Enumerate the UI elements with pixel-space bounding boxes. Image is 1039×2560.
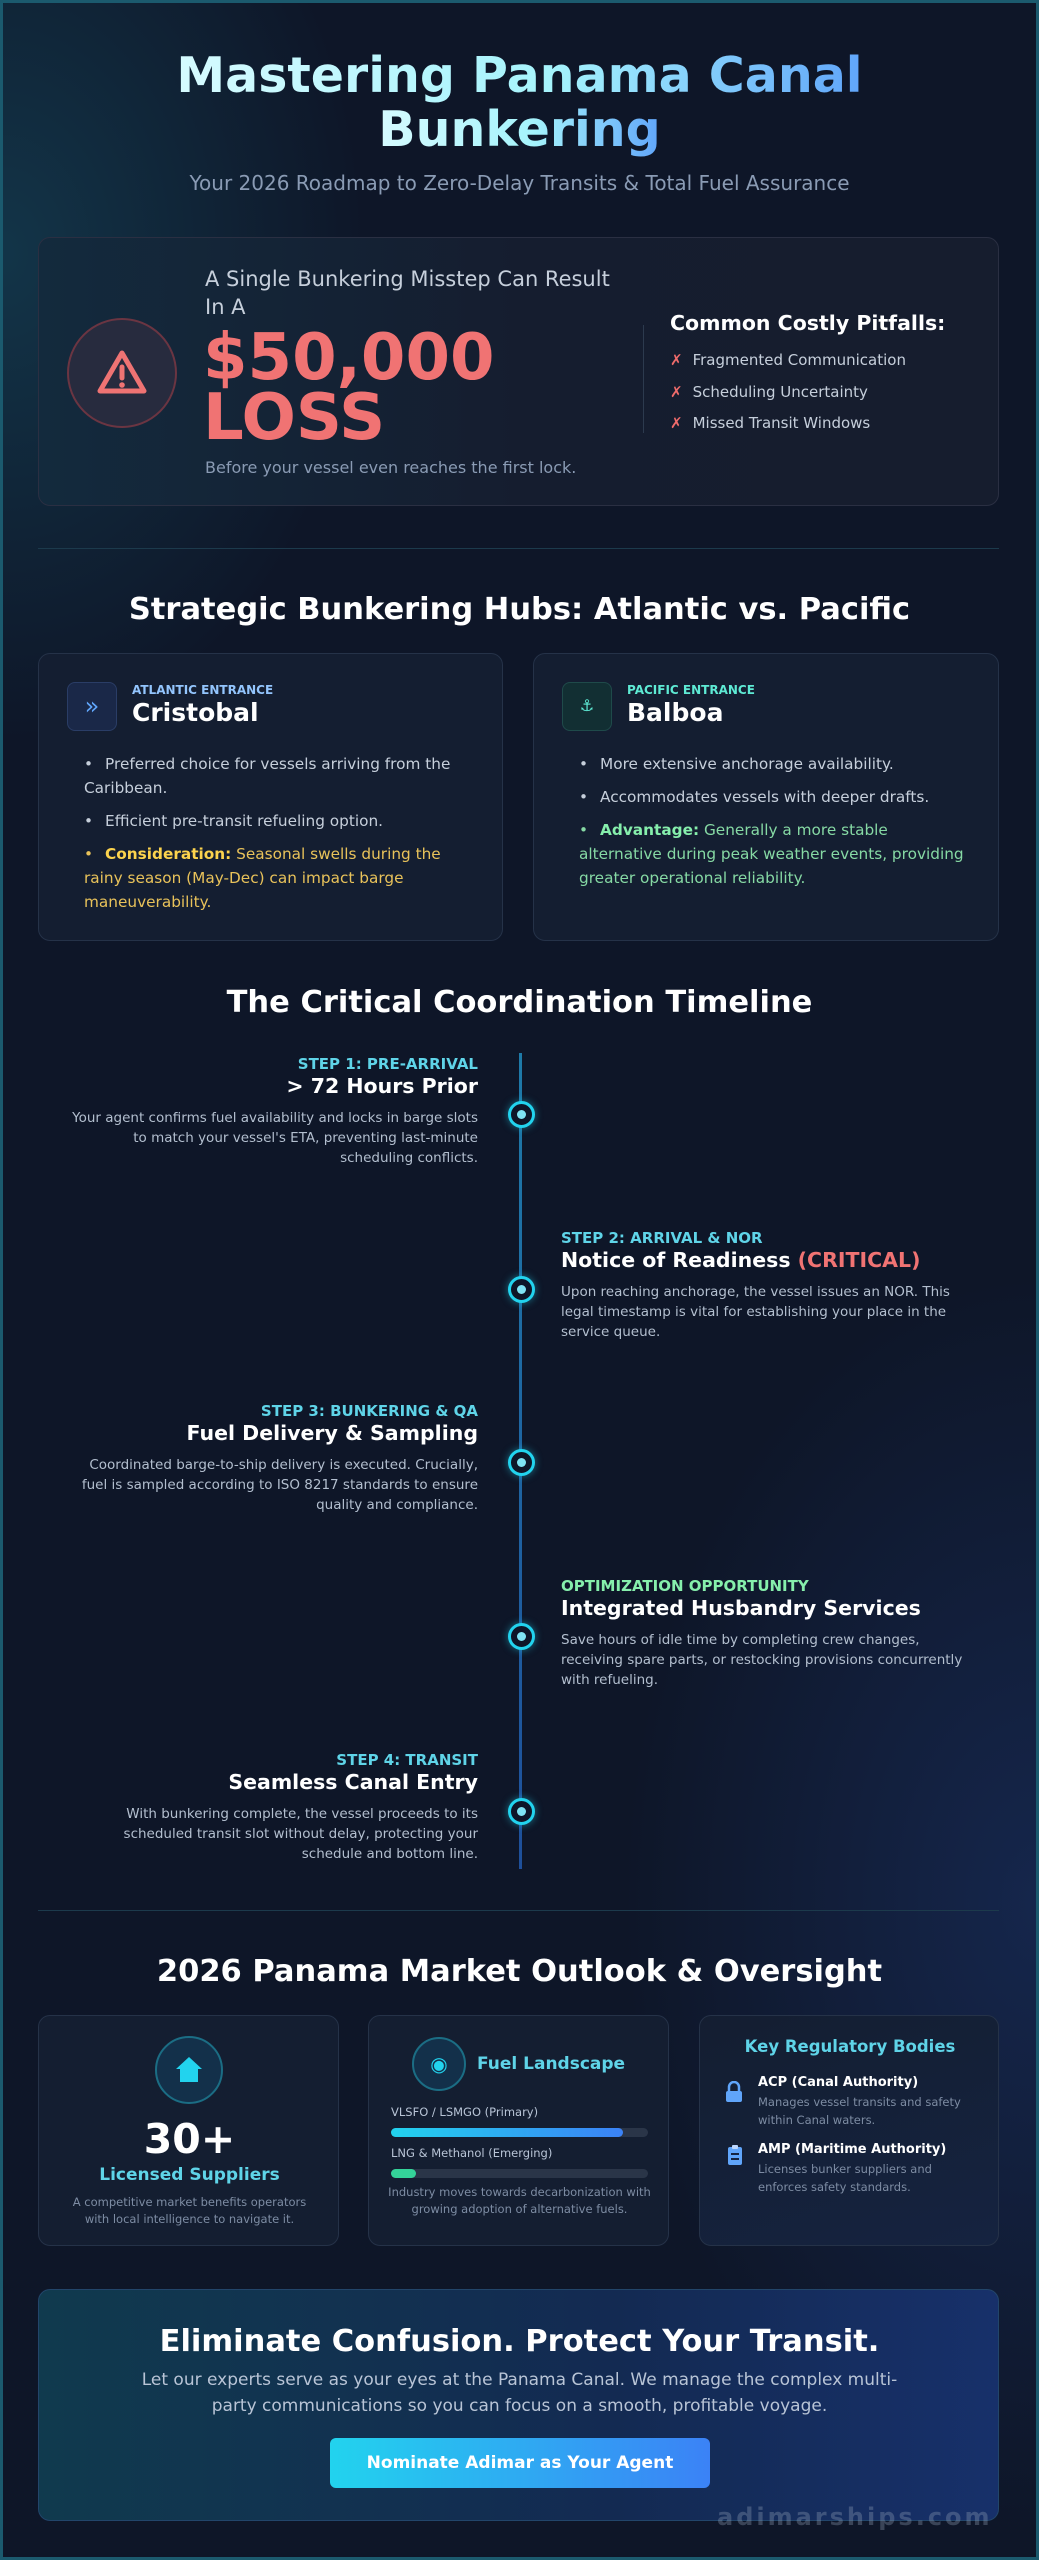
bullets: Advantage: Generally a more stable xyxy=(600,821,888,839)
pitfalls list: ✗ Missed Transit Windows xyxy=(670,414,870,432)
step 2: STEP 2: ARRIVAL & NOR xyxy=(561,1229,763,1247)
icon: house xyxy=(155,2036,223,2104)
optimization: Integrated Husbandry Services xyxy=(561,1596,921,1620)
timeline xyxy=(504,1053,540,1869)
heading: hubs: Strategic Bunkering Hubs: Atlantic vs. Pacific xyxy=(129,592,910,627)
panel: fuel landscape: Fuel Landscape xyxy=(477,2054,625,2074)
panel: loss alert xyxy=(38,237,999,506)
bullets xyxy=(579,755,964,887)
step 2 xyxy=(561,1229,950,1340)
step 1: STEP 1: PRE-ARRIVAL xyxy=(298,1055,478,1073)
icon: chevrons: » xyxy=(85,692,99,720)
bullets: Preferred choice for vessels arriving from the Caribbean. xyxy=(84,755,450,797)
loss figure: LOSS xyxy=(203,381,385,455)
step 4 xyxy=(124,1751,478,1862)
step 4: Seamless Canal Entry xyxy=(228,1770,478,1794)
ACP: Manages vessel transits and safety within Canal waters. xyxy=(758,2095,961,2127)
alert footnote: Before your vessel even reaches the first lock. xyxy=(205,458,576,477)
alert lead text: A Single Bunkering Misstep Can Result In A xyxy=(205,267,610,319)
step 3 xyxy=(82,1402,478,1513)
hub label xyxy=(627,683,755,727)
ACP xyxy=(758,2075,961,2127)
AMP xyxy=(758,2142,946,2194)
loss figure xyxy=(203,321,494,455)
panel: call to action xyxy=(38,2289,999,2521)
optimization: Save hours of idle time by completing crew changes, receiving spare parts, or restocking provisions concurrently with refueling. xyxy=(561,1632,962,1688)
panel: regulatory xyxy=(699,2015,999,2246)
bar chart xyxy=(391,2105,648,2178)
icon: anchor: ⚓ xyxy=(580,696,594,715)
hub label: Balboa xyxy=(627,698,723,727)
icon: chevrons xyxy=(67,682,117,731)
optimization: OPTIMIZATION OPPORTUNITY xyxy=(561,1577,809,1595)
icon: warning xyxy=(67,318,177,428)
bullets: More extensive anchorage availability. xyxy=(600,755,894,773)
AMP: Licenses bunker suppliers and enforces safety standards. xyxy=(758,2162,932,2194)
bullets: Consideration: Seasonal swells during the rainy season (May-Dec) can impact barge maneuverability. xyxy=(84,845,441,911)
step 3: Fuel Delivery & Sampling xyxy=(187,1421,478,1445)
pitfalls list: ✗ Fragmented Communication xyxy=(670,351,906,369)
bullets: Accommodates vessels with deeper drafts. xyxy=(600,788,929,806)
title: Mastering Panama Canal xyxy=(176,47,863,104)
step 4: STEP 4: TRANSIT xyxy=(336,1751,478,1769)
hub label: PACIFIC ENTRANCE xyxy=(627,683,755,697)
icon: flame: ◉ xyxy=(430,2052,448,2076)
panel: Cristobal xyxy=(38,653,503,941)
AMP: AMP (Maritime Authority) xyxy=(758,2142,946,2157)
step 2: Notice of Readiness (CRITICAL) xyxy=(561,1248,920,1272)
icon: flame xyxy=(412,2037,466,2091)
button xyxy=(330,2438,710,2488)
step 3: STEP 3: BUNKERING & QA xyxy=(261,1402,478,1420)
step 1 xyxy=(72,1055,478,1166)
bullets xyxy=(84,755,450,911)
pitfalls list: Common Costly Pitfalls: xyxy=(670,311,945,335)
hub label xyxy=(132,683,273,727)
icon: lock xyxy=(726,2081,742,2102)
hub label: Cristobal xyxy=(132,698,259,727)
icon: anchor xyxy=(562,682,612,731)
loss figure: $50,000 xyxy=(203,321,494,395)
hub label: ATLANTIC ENTRANCE xyxy=(132,683,273,697)
bullets: alternative during peak weather events, providing greater operational reliability. xyxy=(579,845,964,887)
panel: suppliers xyxy=(38,2015,339,2246)
step 1: > 72 Hours Prior xyxy=(286,1074,478,1098)
watermark: adimarships.com xyxy=(717,2503,993,2531)
stat: 30+ xyxy=(144,2115,235,2163)
step 3: Coordinated barge-to-ship delivery is executed. Crucially, fuel is sampled according to ISO 8217 standards to ensure quality and compliance. xyxy=(82,1457,478,1513)
pitfalls list: ✗ Scheduling Uncertainty xyxy=(670,382,868,400)
heading: timeline: The Critical Coordination Timeline xyxy=(227,985,812,1020)
panel: suppliers: A competitive market benefits operators with local intelligence to navigate it. xyxy=(73,2195,306,2226)
bullets: Efficient pre-transit refueling option. xyxy=(105,812,383,830)
button: Nominate Adimar as Your Agent xyxy=(367,2453,673,2473)
panel: call to action: Let our experts serve as your eyes at the Panama Canal. We manage the complex multi-party communications so you can focus on a smooth, profitable voyage. xyxy=(142,2370,897,2416)
pitfalls list xyxy=(670,311,945,432)
step 4: With bunkering complete, the vessel proceeds to its scheduled transit slot without delay, protecting your schedule and bottom line. xyxy=(124,1806,478,1862)
title xyxy=(176,47,863,158)
panel: Balboa xyxy=(533,653,999,941)
panel: fuel landscape: Industry moves towards decarbonization with growing adoption of alternative fuels. xyxy=(388,2185,651,2216)
title: Bunkering xyxy=(378,101,661,158)
step 2: Upon reaching anchorage, the vessel issues an NOR. This legal timestamp is vital for establishing your place in the service queue. xyxy=(561,1284,950,1340)
panel: call to action: Eliminate Confusion. Protect Your Transit. xyxy=(160,2324,879,2359)
panel: regulatory: Key Regulatory Bodies xyxy=(745,2037,955,2056)
ACP: ACP (Canal Authority) xyxy=(758,2075,918,2090)
step 1: Your agent confirms fuel availability and locks in barge slots to match your vessel's ETA, preventing last-minute scheduling conflicts. xyxy=(72,1110,478,1166)
bar chart: VLSFO / LSMGO (Primary) xyxy=(391,2105,538,2119)
panel: suppliers: Licensed Suppliers xyxy=(99,2165,280,2185)
panel: fuel landscape xyxy=(368,2015,669,2246)
icon: clipboard xyxy=(728,2145,742,2165)
optimization xyxy=(561,1577,962,1688)
bar chart: LNG & Methanol (Emerging) xyxy=(391,2146,552,2160)
heading: market: 2026 Panama Market Outlook & Oversight xyxy=(157,1954,882,1989)
subtitle: Your 2026 Roadmap to Zero-Delay Transits & Total Fuel Assurance xyxy=(189,171,850,195)
